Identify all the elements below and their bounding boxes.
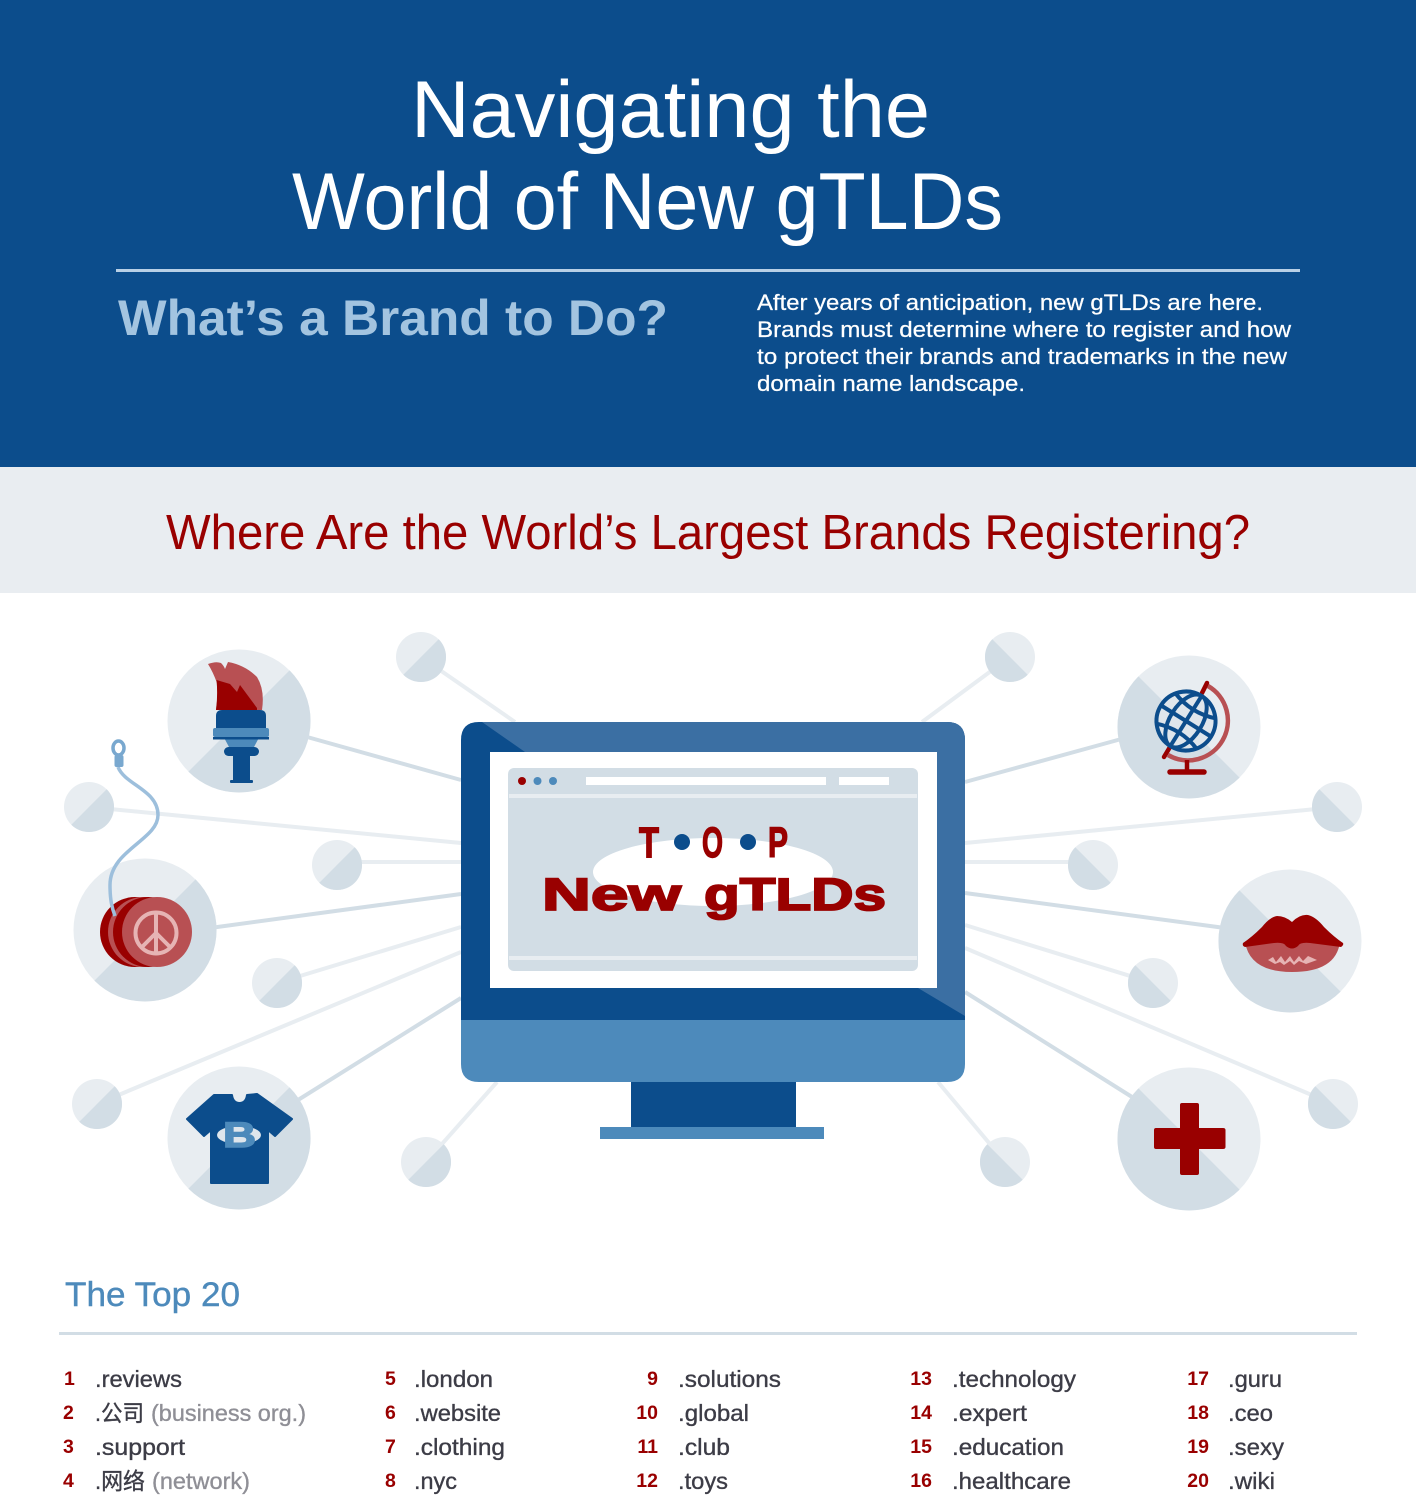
icon: medical cross	[1117, 1068, 1260, 1211]
list: ranks 9-12: 9	[647, 1368, 658, 1390]
list: ranks 1-4: (network)	[152, 1468, 250, 1494]
intro text: Brands must determine where to register and how	[757, 317, 1292, 342]
subtitle: What’s a Brand to Do?	[118, 290, 668, 346]
list: ranks 17-20: 18	[1187, 1402, 1209, 1424]
list: ranks 17-20	[1187, 1366, 1285, 1494]
list: ranks 9-12: 12	[636, 1470, 658, 1492]
icon: t-shirt	[168, 1066, 311, 1210]
list: ranks 1-4: 1	[64, 1368, 75, 1390]
small nodes left	[64, 632, 451, 1187]
list: ranks 5-8: .london	[414, 1366, 493, 1392]
title	[292, 65, 1003, 247]
list: ranks 1-4: 3	[63, 1436, 74, 1458]
icon: torch	[168, 650, 311, 793]
list: ranks 9-12: .solutions	[678, 1366, 781, 1392]
list: ranks 1-4: 4	[63, 1470, 74, 1492]
list: ranks 1-4: .网络	[95, 1468, 145, 1494]
list: ranks 17-20: 20	[1187, 1470, 1209, 1492]
list: ranks 13-16: 13	[910, 1368, 932, 1390]
heading: the top 20: The Top 20	[65, 1276, 240, 1314]
panel: section heading band	[0, 467, 1416, 593]
list: ranks 13-16	[910, 1366, 1077, 1494]
screen label: top new gTLDs	[542, 819, 886, 920]
panel: header	[0, 0, 1416, 467]
list: ranks 9-12	[636, 1366, 781, 1494]
list: ranks 13-16: .technology	[952, 1366, 1077, 1392]
monitor stand	[600, 1080, 824, 1139]
intro text: to protect their brands and trademarks in the new	[757, 344, 1288, 369]
title: World of New gTLDs	[292, 157, 1003, 247]
intro text: After years of anticipation, new gTLDs are here.	[757, 290, 1263, 315]
title: Navigating the	[411, 65, 930, 155]
screen label: top new gTLDs: P	[768, 819, 788, 867]
list: ranks 5-8: 8	[385, 1470, 396, 1492]
list: ranks 9-12: .club	[678, 1434, 730, 1460]
list: ranks 13-16: .healthcare	[952, 1468, 1071, 1494]
icon: lips	[1218, 870, 1362, 1013]
list: ranks 1-4	[63, 1366, 306, 1494]
list: ranks 17-20: .guru	[1228, 1366, 1282, 1392]
list: ranks 13-16: 15	[910, 1436, 932, 1458]
icon: yo-yo	[74, 741, 217, 1002]
list: ranks 5-8: .nyc	[414, 1468, 457, 1494]
section heading: Where Are the World’s Largest Brands Registering?	[166, 506, 1250, 560]
list: ranks 9-12: .toys	[678, 1468, 728, 1494]
list: ranks 9-12: 10	[636, 1402, 658, 1424]
list: ranks 13-16: 16	[910, 1470, 932, 1492]
list: ranks 1-4: 2	[63, 1402, 74, 1424]
intro text	[757, 290, 1292, 396]
list: ranks 17-20: .sexy	[1228, 1434, 1285, 1460]
list: ranks 17-20: 19	[1187, 1436, 1209, 1458]
list: ranks 1-4: (business org.)	[151, 1400, 306, 1426]
list: ranks 13-16: 14	[910, 1402, 932, 1424]
list: ranks 5-8	[385, 1366, 505, 1494]
list: ranks 1-4: .reviews	[95, 1366, 182, 1392]
list: ranks 5-8: 5	[385, 1368, 396, 1390]
list: ranks 5-8: .website	[414, 1400, 501, 1426]
small nodes right	[980, 632, 1362, 1187]
monitor body	[461, 722, 965, 1082]
list: ranks 9-12: .global	[678, 1400, 749, 1426]
list: ranks 9-12: 11	[637, 1436, 658, 1458]
list: ranks 17-20: .wiki	[1228, 1468, 1275, 1494]
list: ranks 5-8: .clothing	[414, 1434, 505, 1460]
icon: globe	[1117, 656, 1260, 799]
screen label: top new gTLDs: New	[542, 869, 682, 920]
list: ranks 5-8: 7	[385, 1436, 396, 1458]
screen label: top new gTLDs: gTLDs	[704, 869, 886, 920]
list: ranks 17-20: 17	[1187, 1368, 1209, 1390]
list: ranks 13-16: .education	[952, 1434, 1064, 1460]
list: ranks 13-16: .expert	[952, 1400, 1028, 1426]
list: ranks 17-20: .ceo	[1228, 1400, 1273, 1426]
list: ranks 1-4: .公司	[95, 1400, 144, 1426]
browser window	[508, 768, 918, 971]
list: ranks 1-4: .support	[95, 1434, 186, 1460]
screen label: top new gTLDs: O	[702, 819, 723, 867]
icon: t-shirt: B	[223, 1116, 256, 1155]
connector lines	[89, 657, 1337, 1162]
list: ranks 5-8: 6	[385, 1402, 396, 1424]
intro text: domain name landscape.	[757, 371, 1025, 396]
monitor	[461, 722, 965, 1139]
screen label: top new gTLDs: T	[639, 819, 659, 867]
